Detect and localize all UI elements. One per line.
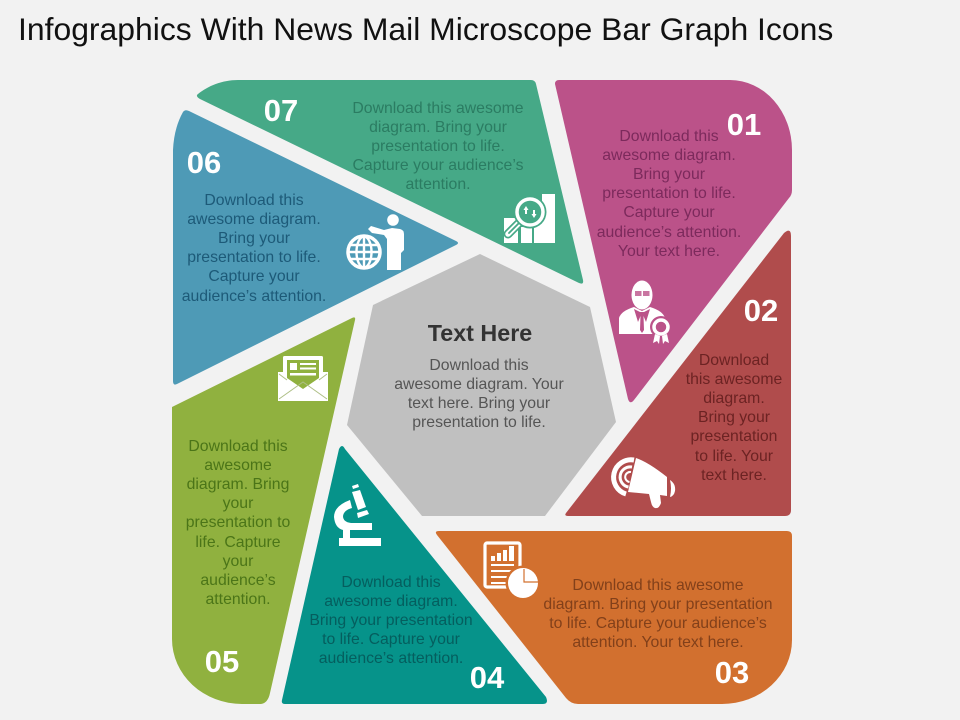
panel: 07 <box>197 80 583 284</box>
text block 07: Download this awesome <box>352 100 524 117</box>
text block 04: Bring your presentation <box>309 612 473 629</box>
segment shape 01 <box>555 80 792 402</box>
segment shape 02 <box>565 231 791 516</box>
center text block: awesome diagram. Your <box>394 376 564 393</box>
text block 02: diagram. <box>703 390 765 407</box>
panel: 05 <box>172 317 355 704</box>
text block 05: diagram. Bring <box>187 476 289 493</box>
text block 03: Download this awesome <box>572 577 744 594</box>
segment shape 03 <box>436 531 792 704</box>
icon: magnifier over bar graph <box>504 194 555 243</box>
text block 02: text here. <box>701 467 767 484</box>
icon: businessman with award rosette <box>619 280 672 344</box>
text block 05: presentation to <box>186 514 290 531</box>
text block 06: Bring your <box>218 230 290 247</box>
text block 06: audience’s attention. <box>182 288 326 305</box>
panel: 02 <box>565 231 791 516</box>
segment shape 07 <box>197 80 583 284</box>
segment shape 04 <box>282 446 547 704</box>
text block 02: presentation <box>691 428 777 445</box>
center shape <box>347 254 616 516</box>
text block 05: audience’s <box>200 572 276 589</box>
text block 02: Download <box>699 352 769 369</box>
number 02: 02 <box>744 293 778 328</box>
text block 04: Download this <box>341 574 441 591</box>
icon: mail envelope with news <box>278 356 328 401</box>
text block 07: presentation to life. <box>371 138 505 155</box>
number 07: 07 <box>264 93 298 128</box>
text block 01: Download this <box>619 128 719 145</box>
text block 07: attention. <box>406 176 470 193</box>
number 01: 01 <box>727 107 761 142</box>
text block 06: Capture your <box>208 268 300 285</box>
icon: report with pie chart <box>485 543 540 600</box>
number 05: 05 <box>205 644 239 679</box>
text block 06: awesome diagram. <box>187 211 321 228</box>
text block 04: audience’s attention. <box>319 650 463 667</box>
panel: center heptagon <box>347 254 616 516</box>
text block 01: presentation to life. <box>602 185 736 202</box>
icon: person with globe <box>348 214 404 270</box>
text block 05: attention. <box>206 591 270 608</box>
segment shape 05 <box>172 317 355 704</box>
number 06: 06 <box>187 145 221 180</box>
text block 01: Your text here. <box>618 243 720 260</box>
center text block: text here. Bring your <box>408 395 550 412</box>
text block 02: to life. Your <box>695 448 773 465</box>
number 03: 03 <box>715 655 749 690</box>
text block 03: to life. Capture your audience’s <box>549 615 767 632</box>
text block 05: Download this <box>188 438 288 455</box>
panel: 01 <box>555 80 792 402</box>
text block 04: awesome diagram. <box>324 593 458 610</box>
title: Infographics With News Mail Microscope Bar Graph Icons <box>18 11 833 47</box>
center heading: Text Here <box>428 320 532 346</box>
text block 05: your <box>223 553 253 570</box>
panel: 04 <box>282 446 547 704</box>
text block 01: Capture your <box>623 204 715 221</box>
icon: microscope <box>334 484 381 546</box>
text block 03: attention. Your text here. <box>572 634 744 651</box>
panel: 03 <box>436 531 792 704</box>
text block 05: your <box>223 495 253 512</box>
text block 07: diagram. Bring your <box>369 119 507 136</box>
text block 02: this awesome <box>686 371 782 388</box>
text block 01: audience’s attention. <box>597 224 741 241</box>
text block 06: Download this <box>204 192 304 209</box>
text block 05: awesome <box>204 457 272 474</box>
text block 05: life. Capture <box>195 534 281 551</box>
text block 03: diagram. Bring your presentation <box>543 596 773 613</box>
text block 04: to life. Capture your <box>322 631 460 648</box>
center text block: Download this <box>429 357 529 374</box>
segment shape 06 <box>173 110 458 385</box>
number 04: 04 <box>470 660 505 695</box>
center text block: presentation to life. <box>412 414 546 431</box>
text block 01: Bring your <box>633 166 705 183</box>
panel: 06 <box>173 110 458 385</box>
text block 02: Bring your <box>698 409 770 426</box>
text block 01: awesome diagram. <box>602 147 736 164</box>
icon: megaphone <box>614 458 675 508</box>
text block 07: Capture your audience’s <box>353 157 524 174</box>
text block 06: presentation to life. <box>187 249 321 266</box>
